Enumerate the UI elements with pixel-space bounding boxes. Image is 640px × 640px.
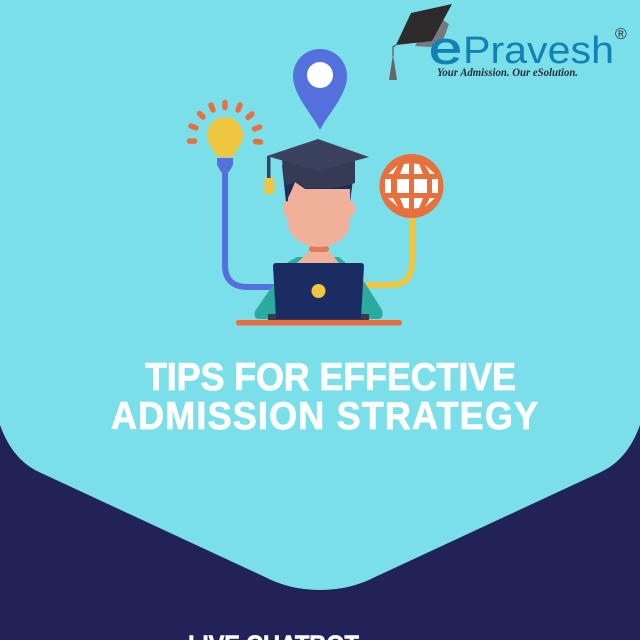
- logo: ePravesh: [389, 4, 627, 80]
- icon: location pin: [293, 49, 347, 130]
- wire: yellow connector: [362, 215, 412, 285]
- icon: logo graduation cap: [389, 4, 452, 80]
- desk: [236, 320, 402, 326]
- collar: [309, 246, 329, 252]
- icon: light bulb: [190, 102, 260, 172]
- title second line: ADMISSION STRATEGY: [111, 394, 538, 437]
- hair: [282, 165, 355, 202]
- laptop: [268, 263, 369, 320]
- graduation cap: [264, 139, 369, 194]
- logo tagline: Your Admission. Our eSolution.: [437, 65, 578, 79]
- title: TIPS FOR EFFECTIVE: [145, 355, 516, 398]
- icon: globe: [380, 154, 444, 218]
- registered mark: ®: [615, 26, 627, 43]
- shoulders: [254, 257, 382, 319]
- neck: [297, 240, 339, 263]
- illustration: student with laptop: [190, 49, 444, 326]
- ears: [283, 201, 293, 217]
- logo letter e: e: [429, 22, 462, 74]
- navy bottom panel with chevron edge: [0, 425, 640, 640]
- face: [288, 182, 350, 247]
- logo wordmark: Pravesh: [463, 30, 614, 72]
- wire: blue connector: [225, 170, 275, 287]
